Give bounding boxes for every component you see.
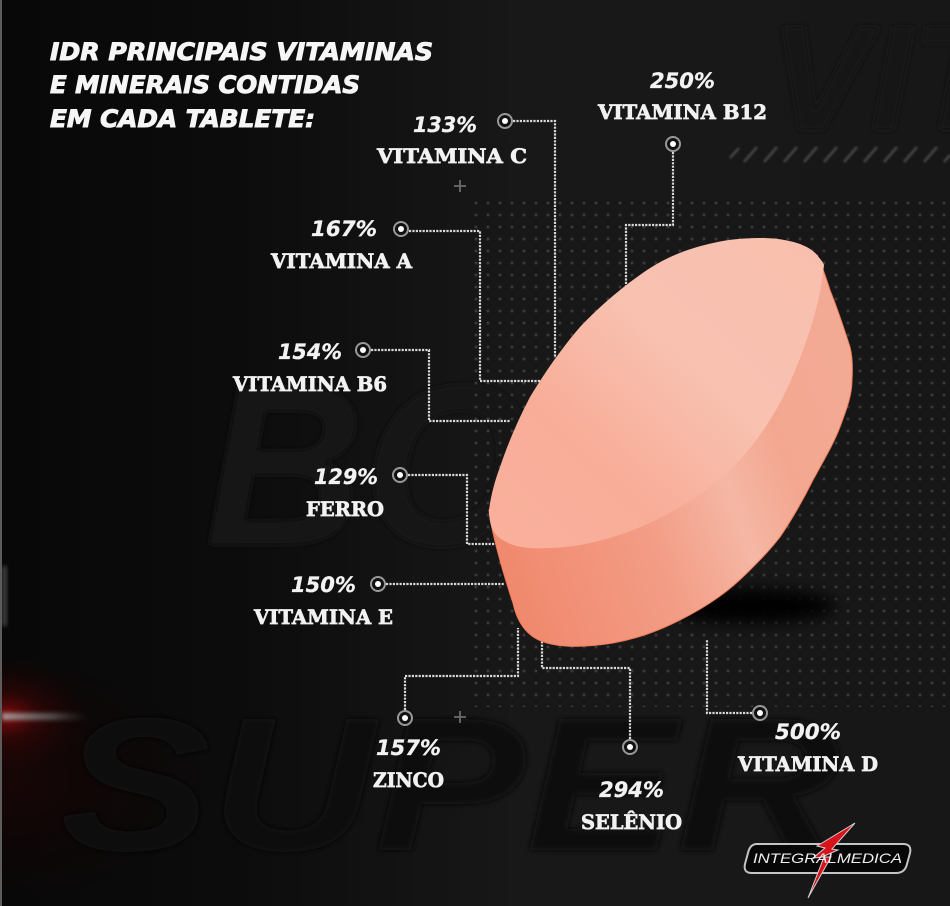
callout: zinco [373,711,444,792]
title: IDR PRINCIPAIS VITAMINAS [50,38,433,66]
callout: vitamina b6: VITAMINA B6 [232,372,387,396]
callout: vitamina b12: 250% [650,69,715,93]
callout: ferro [306,465,407,521]
logo: integralmedica [745,823,910,898]
tablet top face [489,238,824,548]
callout: vitamina e: 150% [291,573,356,597]
callout: vitamina a [270,217,412,273]
callout: vitamina b6 [232,340,387,396]
callout: vitamina b12: VITAMINA B12 [597,100,767,124]
callout: selenio: SELÊNIO [581,810,682,834]
callout: vitamina b6: 154% [278,340,342,364]
plus marks [454,180,466,723]
callout: selenio [581,740,682,834]
title [50,38,433,133]
callout: selenio: 294% [599,778,664,802]
callout: zinco: ZINCO [373,768,444,792]
tablet side [489,255,852,646]
ghost background lettering: BOO [205,337,705,594]
callout: vitamina d [737,706,878,776]
tablet shadow [660,589,836,623]
connector lines [371,121,752,739]
callout: vitamina b12 [597,69,767,151]
callout: vitamina e [253,573,393,629]
callout: vitamina e: VITAMINA E [253,605,393,629]
callout: ferro: FERRO [306,497,384,521]
title: E MINERAIS CONTIDAS [50,71,360,99]
callout: vitamina c: VITAMINA C [376,144,527,168]
title: EM CADA TABLETE: [50,105,315,133]
logo: integralmedica: INTEGRALMEDICA [753,850,902,866]
dot grid texture [470,197,950,707]
callout: vitamina d: 500% [775,720,841,744]
callout: vitamina a: VITAMINA A [270,249,412,273]
decorative slashes [730,147,950,162]
callout: vitamina d: VITAMINA D [737,752,878,776]
callout: vitamina a: 167% [311,217,377,241]
callout: ferro: 129% [314,465,378,489]
callout: zinco: 157% [376,736,441,760]
callout: vitamina c [376,113,527,168]
ghost background lettering: SUPER [60,679,840,891]
tablet [489,238,852,646]
callout: vitamina c: 133% [413,113,477,137]
